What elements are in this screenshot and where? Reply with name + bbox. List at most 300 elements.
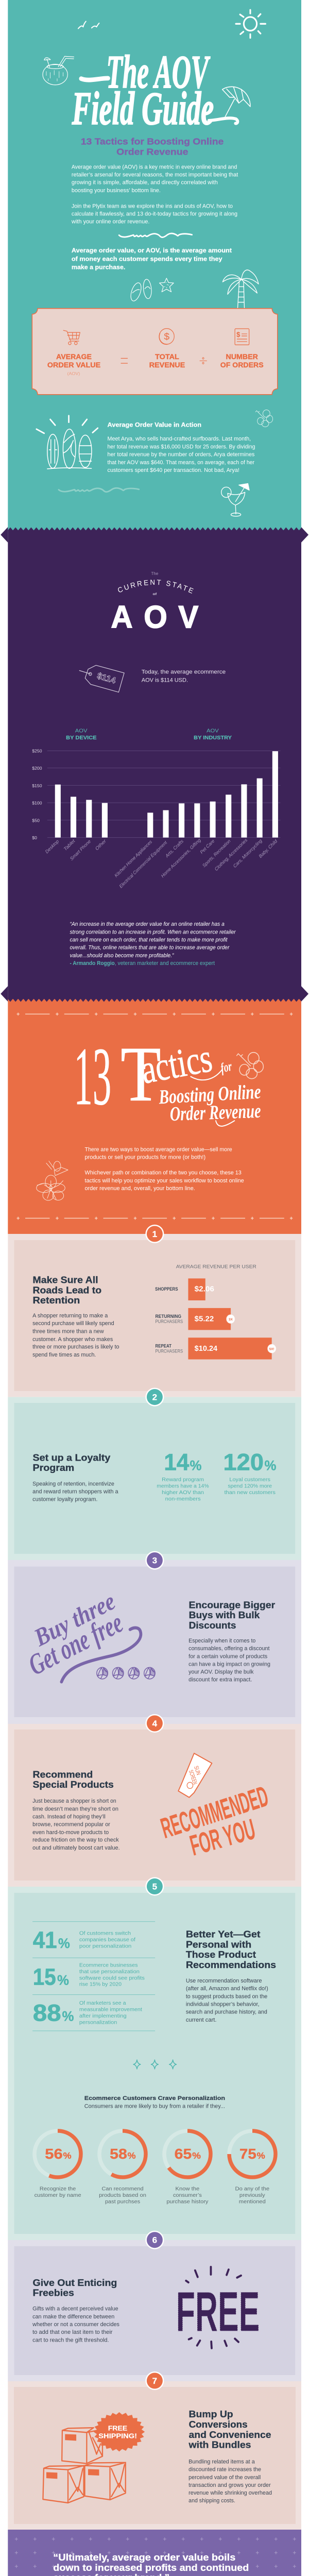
title: The AOV Field Guide: The AOV (107, 46, 211, 98)
stat: 15 percent (33, 1962, 145, 1990)
badge: 1: 1 (152, 1229, 157, 1239)
bar chart: AOV by device and industry: Baby, Child (258, 838, 279, 859)
text: intro paragraphs (71, 164, 238, 225)
badge: 3 (145, 1551, 164, 1570)
text: bundles body: revenue while shrinking overhead (188, 2490, 272, 2496)
chart: 65 percent donut: Know the (176, 2187, 200, 2192)
text: total revenue (149, 353, 185, 369)
icon: sunscreen tube: SUN (193, 1765, 202, 1776)
text: bulk discount body: consumables, offering a discount (188, 1646, 270, 1652)
text: personal body: search and purchase history, and (186, 2009, 267, 2015)
stat: 15 percent: 15 (33, 1964, 56, 1990)
illustration: stacked boxes (43, 2428, 126, 2503)
text: bundles body (188, 2459, 272, 2504)
stat: 88 percent: measurable improvement (79, 2007, 142, 2012)
text: total revenue: REVENUE (149, 361, 185, 369)
bar chart: average revenue per user: SHOPPERS (155, 1286, 178, 1292)
bar chart: AOV by device and industry: Home Accessories, Gifting (160, 837, 202, 878)
heading: recommend special products: Special Products (33, 1780, 114, 1790)
chart: 75 percent donut: 75 (239, 2145, 256, 2162)
heading: customers crave personalization: Consumers are more likely to buy from a retailer if they... (84, 2103, 225, 2109)
chart: 75 percent donut: Do any of the (235, 2187, 270, 2192)
panel: tactic 4 recommend special products (8, 1724, 301, 1887)
text: intro paragraphs: growing it is simple, affordable, and directly correlated with (72, 179, 218, 186)
text: two ways to boost AOV: order revenue and, overall, your bottom line. (85, 1185, 195, 1192)
badge: free shipping: SHIPPING! (98, 2432, 137, 2440)
heading: better yet get personal: Recommendations (186, 1959, 276, 1970)
bar chart: average revenue per user: RETURNING (156, 1314, 181, 1319)
subtitle (81, 137, 224, 157)
badge: 2: 2 (152, 1393, 157, 1402)
text: personal body: (after all, Amazon and Netflix do!) (186, 1986, 268, 1992)
chart: 58 percent donut (99, 2131, 146, 2205)
text: Arya example: that her AOV was $640. That means, on average, each of her (108, 460, 254, 466)
text: Arya example: her total revenue was $16,000 USD for 25 orders. By dividing (108, 444, 255, 450)
bar chart: average revenue per user: $10.24 (195, 1344, 217, 1352)
text: recommend body: browse, recommend popular or (32, 1821, 110, 1828)
text: retention body: spend five times as much. (32, 1352, 96, 1358)
text: average order value: ORDER VALUE (47, 361, 100, 369)
chart: 56 percent donut: % (63, 2150, 72, 2161)
text: bundles body: and shipping costs. (188, 2498, 235, 2504)
stat: 88 percent: personalization (79, 2020, 117, 2025)
stat: 120 percent: % (265, 1459, 276, 1473)
text: average order value: AVERAGE (56, 353, 92, 361)
panel: current state of AOV (1, 527, 308, 1002)
text: number of orders: OF ORDERS (220, 361, 264, 369)
text: loyalty body: Speaking of retention, incentivize (32, 1481, 114, 1487)
icon: division sign (200, 358, 207, 364)
bar chart: average revenue per user: 3X (229, 1318, 233, 1321)
heading: make sure all roads lead to retention (33, 1275, 101, 1306)
text: bulk discount body: can have a big impact on growing (188, 1661, 270, 1668)
icon: beach umbrella (222, 87, 250, 117)
icon: flip flops (129, 279, 152, 302)
icon: sunscreen tube: SCREEN (187, 1769, 198, 1786)
bar chart: average revenue per user: REPEAT (156, 1343, 172, 1349)
text: freebies body: cart to reach the gift threshold. (32, 2337, 109, 2343)
panel: 13 tactics intro (17, 1013, 293, 1219)
heading: bump up conversions (188, 2409, 271, 2450)
text: average AOV: Today, the average ecommerce (142, 669, 226, 675)
icon: hibiscus (237, 1053, 263, 1079)
stat: 88 percent: after implementing (79, 2013, 127, 2019)
heading: give out enticing freebies (33, 2278, 117, 2298)
stat: 14 percent: Reward program (162, 1477, 204, 1483)
divider: wave (119, 233, 192, 238)
text: two ways to boost AOV: products or sell your products for more (or both!) (85, 1154, 205, 1161)
heading: better yet get personal: Personal with (186, 1939, 251, 1950)
badge: 5: 5 (152, 1882, 157, 1892)
subtitle: Order Revenue (116, 147, 188, 157)
stat: 41 percent: companies because of (79, 1937, 135, 1943)
icon: sun (236, 10, 265, 38)
heading: AOV in action: Average Order Value in Action (108, 422, 201, 429)
text: retention body (32, 1313, 119, 1358)
heading: customers crave personalization (84, 2095, 225, 2109)
text: freebies body: to add that one last item to their (32, 2329, 113, 2335)
title: The AOV Field Guide: Field Guide (72, 83, 214, 135)
heading: encourage bigger buys with bulk discounts: Buys with Bulk (189, 1610, 260, 1620)
text: intro paragraphs: Join the Plytix team as we explore the ins and outs of AOV, how to (72, 203, 233, 209)
heading: the current state of AOV: CURRENT STATE (118, 580, 194, 594)
chart: 56 percent donut (35, 2131, 81, 2198)
bar chart: AOV by device and industry: Electrical Commercial Equipment (118, 840, 168, 889)
text: freebies body: can make the difference between (32, 2314, 114, 2320)
heading: AOV by industry (194, 728, 232, 741)
icon: receipt: $ (236, 331, 241, 338)
bar chart: average revenue per user: $5.22 (195, 1314, 214, 1323)
panel: tactic 7 bundles (8, 2381, 301, 2530)
icon: hibiscus (255, 410, 273, 427)
badge: 7: 7 (152, 2376, 157, 2386)
callout: quote (53, 2552, 249, 2576)
heading: make sure all roads lead to retention: Make Sure All (33, 1275, 98, 1285)
stat: 120 percent: 120 (224, 1450, 264, 1476)
icon: surfboards (37, 416, 98, 469)
icon: sunscreen tube (178, 1753, 212, 1798)
subtitle: 13 Tactics for Boosting Online (81, 137, 224, 147)
bar chart: average revenue per user (155, 1264, 277, 1360)
text: AOV definition (72, 247, 232, 271)
icon: equals sign (121, 358, 128, 363)
stat list: personalization stats (32, 1922, 155, 2031)
text: bulk discount body: discount for extra impact. (188, 1676, 252, 1683)
text: bundles body: Bundling related items at a (188, 2459, 255, 2465)
text: number of orders: NUMBER (226, 353, 258, 361)
panel: orange 13 tactics background (8, 997, 301, 1234)
text: AOV definition: make a purchase. (72, 264, 125, 271)
heading: AOV by device: BY DEVICE (66, 735, 97, 741)
text: personal body: Use recommendation software (186, 1978, 262, 1984)
text: Arya example: her total revenue by the number of orders, Arya determines (108, 451, 254, 458)
callout: Armando Roggio quote (70, 921, 236, 967)
icon: coin: $ (164, 331, 169, 342)
heading: the current state of AOV (111, 571, 199, 635)
title: 13 Tactics for Boosting Online Order Revenue: Boosting Online (158, 1081, 262, 1109)
chart: 75 percent donut: previously (239, 2193, 265, 2198)
heading: the current state of AOV: AOV (111, 599, 198, 635)
icon: sparkles (133, 2060, 176, 2069)
heading: AOV by device (66, 728, 97, 741)
panel: AOV in action (37, 410, 273, 516)
icon: palm tree (222, 270, 259, 308)
chart: 56 percent donut: 56 (45, 2145, 63, 2162)
stat: 15 percent: Ecommerce businesses (79, 1962, 138, 1968)
icon: shopping cart (63, 330, 80, 345)
chart: 56 percent donut: customer by name (35, 2193, 81, 2198)
text: intro paragraphs: calculate it flawlessly, and 13 do-it-today tactics for growing it along (72, 211, 237, 217)
bar chart: AOV by device and industry: Pet Care (199, 838, 215, 855)
text: two ways to boost AOV: Whichever path or combination of the two you choose, these 13 (85, 1170, 242, 1176)
bar chart: average revenue per user: 5X! (269, 1347, 274, 1351)
text: intro paragraphs: with your online order revenue. (71, 218, 149, 225)
bar chart: AOV by device and industry: Cars, Motorcycling (232, 838, 263, 869)
panel: AOV formula ticket (32, 309, 278, 395)
panel: tactic 6 freebies (8, 2240, 301, 2381)
stat: 88 percent: Of marketers see a (79, 2001, 126, 2006)
text: average AOV (142, 669, 226, 684)
text: personal body: individual shopper’s behavior, (186, 2001, 260, 2008)
panel: tactic 3 bulk discounts (8, 1560, 301, 1724)
callout: Armando Roggio quote: , veteran marketer and ecommerce expert (115, 960, 215, 967)
bar chart: average revenue per user: PURCHASERS (156, 1348, 183, 1353)
stat: 15 percent: software could see profits (79, 1975, 145, 1981)
heading: give out enticing freebies: Freebies (33, 2287, 74, 2298)
stat: 88 percent (33, 2001, 142, 2026)
callout: Armando Roggio quote: can sell more on each order, that retailer tends to make more profit (70, 937, 228, 943)
text: personal body: current cart. (186, 2017, 217, 2023)
heading: set up a loyalty program: Set up a Loyalty (33, 1452, 110, 1463)
text: average AOV: AOV is $114 USD. (142, 677, 188, 684)
stat: 41 percent: Of customers switch (79, 1930, 131, 1937)
heading: encourage bigger buys with bulk discounts: Encourage Bigger (189, 1600, 275, 1611)
bar chart: AOV by device and industry: $50 (32, 818, 40, 823)
text: recommend body: time doesn’t mean they’re short on (32, 1806, 118, 1812)
stat: 14 percent: non-members (165, 1496, 201, 1502)
heading: recommend special products: Recommend (33, 1769, 93, 1780)
title: The AOV Field Guide (72, 46, 237, 135)
stat: 120 percent (224, 1450, 276, 1496)
chart: 65 percent donut: % (192, 2150, 201, 2161)
chart: 75 percent donut: % (257, 2150, 265, 2161)
number badges (145, 1225, 164, 2576)
heading: customers crave personalization: Ecommerce Customers Crave Personalization (84, 2095, 225, 2102)
icon: flower (37, 1161, 68, 1200)
stat: 15 percent: rise 15% by 2020 (79, 1982, 122, 1988)
stat: 14 percent: members have a 14% (157, 1483, 209, 1489)
bar chart: AOV by device and industry: Tablet (63, 838, 76, 852)
bar chart: AOV by device and industry: Clothing, Accessories (214, 837, 249, 872)
bar chart: average revenue per user: AVERAGE REVENUE PER USER (176, 1264, 256, 1269)
stat: 14 percent (157, 1450, 209, 1502)
text: freebies body (32, 2306, 119, 2343)
title: 13 Tactics for Boosting Online Order Revenue: actics (138, 1035, 215, 1092)
heading: make sure all roads lead to retention: Roads Lead to (33, 1285, 101, 1295)
panel: Alex McEachern quote band (8, 2530, 301, 2576)
panel: intro teal header (8, 0, 301, 531)
text: total revenue: TOTAL (155, 353, 179, 361)
text: retention body: three times more than a new (32, 1328, 104, 1335)
icon: seagulls (78, 21, 99, 28)
badge: free shipping (88, 2408, 150, 2456)
bar chart: AOV by device and industry: Sports, Recreation (201, 838, 232, 868)
bar chart: AOV by device and industry: Arts, Crafts (164, 838, 184, 859)
bar chart: AOV by device and industry: Smart Phone (69, 839, 92, 861)
chart: 58 percent donut: Can recommend (101, 2187, 144, 2192)
callout: Armando Roggio quote: strong correlation to an increase in profit. When an ecommerce retailer (70, 929, 236, 936)
bar chart: AOV by device and industry (32, 749, 281, 889)
title: 13 Tactics for Boosting Online Order Revenue (74, 1030, 262, 1126)
text: AOV definition: of money each customer spends every time they (72, 256, 222, 262)
illustration: buy three get one free lettering: Buy three (30, 1587, 119, 1652)
title: 13 Tactics for Boosting Online Order Revenue: Order Revenue (169, 1100, 261, 1125)
chart: 65 percent donut: 65 (175, 2145, 192, 2162)
callout: Armando Roggio quote: overall. Thus, online retailers that are able to increase average order (70, 944, 230, 951)
text: freebies body: whether or not a consumer decides (32, 2321, 119, 2328)
chart: 58 percent donut: products based on (99, 2193, 146, 2198)
text: loyalty body: customer loyalty program. (32, 1497, 97, 1503)
text: recommend body: cash. Instead of hoping they’ll (32, 1814, 106, 1820)
heading: set up a loyalty program: Program (33, 1463, 74, 1473)
chart: 58 percent donut: 58 (110, 2145, 127, 2162)
icon: price tag (79, 665, 124, 692)
heading: AOV by industry: BY INDUSTRY (194, 735, 232, 741)
bar chart: AOV by device and industry: Other (94, 838, 108, 851)
text: personal body: to suggest products based on the (186, 1993, 267, 2000)
text: personal body (186, 1978, 268, 2023)
text: two ways to boost AOV (85, 1146, 244, 1192)
text: AOV definition: Average order value, or AOV, is the average amount (72, 247, 232, 254)
chart: 65 percent donut (164, 2131, 211, 2205)
stat: 14 percent: % (190, 1459, 201, 1473)
icon: coin (159, 329, 174, 344)
bar chart: AOV by device and industry: $200 (32, 766, 42, 771)
panel: tactic 5 personal recommendations (8, 1887, 301, 2240)
heading: encourage bigger buys with bulk discounts (189, 1600, 275, 1631)
stat: 41 percent: % (58, 1936, 70, 1951)
title: 13 Tactics for Boosting Online Order Revenue: 13 (74, 1030, 111, 1122)
title: 13 Tactics for Boosting Online Order Revenue: for (219, 1058, 233, 1076)
badge: 5 (145, 1877, 164, 1896)
text: freebies body: Gifts with a decent perceived value (32, 2306, 118, 2312)
chart: 65 percent donut: consumer’s (173, 2193, 202, 2198)
icon: receipt (235, 329, 249, 345)
badge: 6 (145, 2231, 164, 2249)
text: recommend body (32, 1798, 120, 1851)
text: two ways to boost AOV: tactics will help you optimize your sales workflow to boost online (85, 1178, 244, 1184)
stat: 41 percent: 41 (33, 1927, 57, 1953)
icon: beach balls (97, 1667, 155, 1679)
text: Arya example: customers spent $640 per transaction. Not bad, Arya! (108, 467, 239, 473)
text: bulk discount body: your AOV. Display the bulk (188, 1669, 254, 1675)
chart: 75 percent donut: mentioned (239, 2199, 266, 2205)
callout: quote: “Ultimately, average order value boils (53, 2552, 235, 2563)
chart: 75 percent donut (229, 2131, 276, 2205)
stat: 41 percent (33, 1927, 135, 1953)
heading: set up a loyalty program (33, 1452, 110, 1473)
chart: 56 percent donut: Recognize the (40, 2187, 76, 2192)
text: bulk discount body (188, 1638, 270, 1683)
badge: 6: 6 (152, 2235, 157, 2245)
text: retention body: three or more purchases is likely to (32, 1344, 119, 1350)
illustration: recommended for you lettering (157, 1780, 272, 1862)
stat: 120 percent: spend 120% more (228, 1483, 272, 1489)
panel: tactic 1 retention (8, 1234, 301, 1397)
bar chart: AOV by device and industry: Desktop (44, 839, 60, 854)
text: average order value (47, 353, 100, 376)
callout: quote: down to increased profits and continued (53, 2562, 249, 2573)
bar chart: AOV by device and industry: $100 (32, 801, 42, 806)
heading: AOV by industry: AOV (207, 728, 219, 734)
callout: Armando Roggio quote: value...should also become more profitable.” (70, 953, 174, 959)
heading: bump up conversions: Bump Up (189, 2409, 233, 2419)
callout: Armando Roggio quote: - Armando Roggio (70, 960, 115, 967)
text: number of orders (220, 353, 264, 369)
illustration: FREE lettering (176, 2267, 260, 2348)
heading: the current state of AOV: The (151, 571, 158, 576)
heading: recommend special products (33, 1769, 114, 1790)
heading: bump up conversions: with Bundles (188, 2439, 251, 2450)
chart: 58 percent donut: past purchses (105, 2199, 140, 2205)
heading: bump up conversions: and Convenience (189, 2429, 271, 2440)
text: recommend body: Just because a shopper is short on (32, 1798, 116, 1804)
heading: better yet get personal (186, 1929, 276, 1970)
stat: 14 percent: 14 (164, 1450, 190, 1476)
icon: coconut drink (43, 56, 74, 85)
heading: the current state of AOV: of (153, 592, 157, 596)
text: bundles body: discounted rate increases the (188, 2466, 261, 2473)
stat: 120 percent: Loyal customers (229, 1477, 270, 1483)
badge: free shipping: FREE (108, 2425, 127, 2432)
text: average order value: (AOV) (67, 371, 80, 376)
heading: better yet get personal: Those Product (186, 1950, 256, 1960)
bar chart: AOV by device and industry: $250 (32, 749, 42, 754)
heading: make sure all roads lead to retention: Retention (33, 1295, 80, 1306)
text: two ways to boost AOV: There are two ways to boost average order value—sell more (85, 1146, 232, 1153)
text: bundles body: perceived value of the overall (188, 2475, 261, 2481)
text: intro paragraphs: boosting your business’ bottom line. (72, 188, 161, 194)
stat: 120 percent: than new customers (224, 1490, 276, 1496)
badge: 7 (145, 2371, 164, 2390)
badge: 4: 4 (152, 1719, 158, 1728)
stat: 14 percent: higher AOV than (162, 1490, 204, 1496)
text: recommend body: even hard-to-move products to (32, 1829, 109, 1836)
bar chart: average revenue per user: $2.06 (195, 1284, 214, 1293)
badge: 2 (145, 1388, 164, 1406)
text: loyalty body (32, 1481, 118, 1503)
divider: faded wave (59, 488, 139, 492)
badge: 4 (145, 1714, 164, 1733)
text: Arya example (108, 436, 255, 473)
bar chart: average revenue per user: PURCHASERS (156, 1319, 183, 1324)
stat: 88 percent: 88 (33, 2001, 61, 2026)
icon: starfish (160, 278, 174, 292)
panel: tactic 2 loyalty program (8, 1397, 301, 1560)
badge: 3: 3 (152, 1556, 157, 1566)
bar chart: AOV by device and industry: $150 (32, 784, 42, 788)
chart: 58 percent donut: % (128, 2150, 136, 2161)
text: recommend body: out and ultimately boost cart value. (32, 1845, 120, 1851)
chart: 65 percent donut: purchase history (166, 2199, 209, 2205)
text: recommend body: reduce friction on the way to check (32, 1837, 119, 1843)
stat: 15 percent: % (57, 1973, 69, 1988)
text: bundles body: transaction and grows your order (188, 2482, 271, 2488)
icon: cocktail (221, 484, 249, 516)
stat: 88 percent: % (62, 2009, 74, 2024)
heading: give out enticing freebies: Give Out Enticing (33, 2278, 117, 2288)
illustration: buy three get one free lettering: Get one free (24, 1606, 128, 1682)
badge: 1 (145, 1225, 164, 1243)
text: Arya example: Meet Arya, who sells hand-crafted surfboards. Last month, (108, 436, 251, 442)
text: retention body: A shopper returning to make a (32, 1313, 108, 1319)
text: bulk discount body: Especially when it comes to (188, 1638, 255, 1644)
text: loyalty body: and reward return shoppers with a (32, 1488, 118, 1495)
stat: 15 percent: that use personalization (79, 1969, 140, 1975)
callout: Armando Roggio quote: “An increase in the average order value for an online retailer has a (70, 921, 225, 927)
text: retention body: customer. A shopper who makes (32, 1336, 113, 1343)
text: bulk discount body: for a certain volume of products (188, 1653, 267, 1659)
heading: bump up conversions: Conversions (189, 2419, 248, 2430)
heading: encourage bigger buys with bulk discounts: Discounts (189, 1620, 236, 1631)
bar chart: AOV by device and industry: $0 (32, 836, 37, 840)
title: 13 Tactics for Boosting Online Order Revenue: T (121, 1031, 161, 1118)
text: intro paragraphs: retailer’s arsenal for several reasons, the most important being that (72, 172, 238, 178)
text: intro paragraphs: Average order value (AOV) is a key metric in every online brand and (72, 164, 237, 171)
stat: 41 percent: poor personalization (79, 1943, 131, 1949)
heading: AOV by device: AOV (75, 728, 88, 734)
bar chart: AOV by device and industry: Kitchen Home Appliances (113, 839, 153, 878)
